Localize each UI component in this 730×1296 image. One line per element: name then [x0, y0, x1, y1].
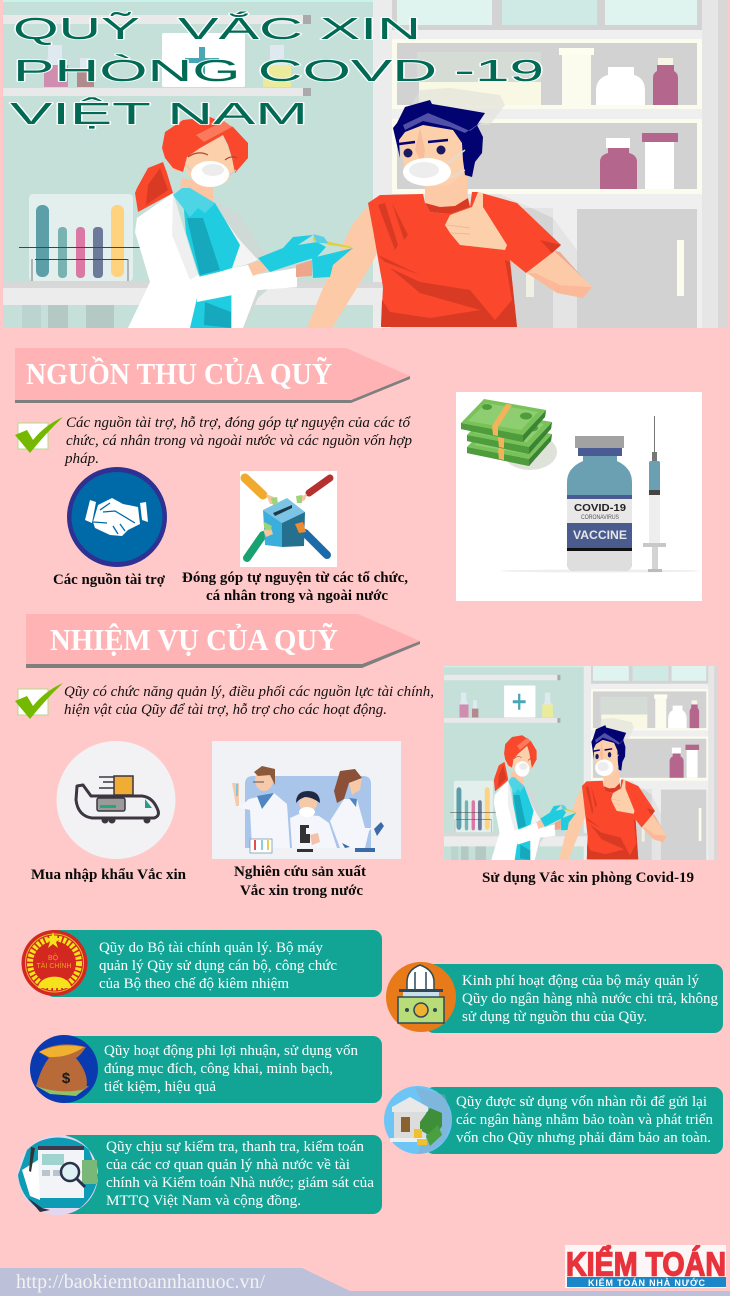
label: vaccine import: Mua nhập khẩu Vắc xin: [31, 867, 186, 883]
hero illustration: nurse vaccinating a man in a clinic: [3, 0, 728, 328]
footer band with website url: http://baokiemtoannhanuoc.vn/: [16, 1271, 265, 1293]
icon: ministry of finance emblem: TÀI CHÍNH: [36, 961, 72, 970]
text block: Kinh phí hoạt động của bộ máy quản lý: [462, 973, 700, 989]
text block: tiết kiệm, hiệu quả: [104, 1079, 217, 1095]
icon: cargo plane: [56, 741, 176, 859]
text block: duties description: [64, 684, 434, 718]
icon: ministry of finance emblem: BỘ: [48, 953, 59, 962]
panel: inspection and audit: [18, 1135, 382, 1215]
title: VIỆT NAM: [10, 96, 308, 131]
text block: duties description: hiện vật của Qũy để tài trợ, hỗ trợ cho các hoạt động.: [64, 702, 387, 718]
text block: đúng mục đích, công khai, minh bạch,: [104, 1061, 333, 1077]
icon: money bag: [30, 1035, 98, 1103]
image: money and covid-19 vaccine: VACCINE: [573, 528, 627, 542]
title: PHÒNG COVD -19: [13, 53, 544, 88]
text block: Qũy do ngân hàng nhà nước chi trả, không: [462, 991, 718, 1007]
text block: Qũy hoạt động phi lợi nhuận, sử dụng vốn: [104, 1043, 359, 1059]
title: [10, 10, 544, 131]
heading: fund duties: NHIỆM VỤ CỦA QUỸ: [50, 622, 338, 657]
panel: managed by ministry of finance: [22, 930, 382, 997]
label: domestic research: Nghiên cứu sản xuất: [234, 864, 366, 880]
text block: chính và Kiểm toán Nhà nước; giám sát của: [106, 1175, 375, 1191]
image: money and covid-19 vaccine: [456, 392, 702, 601]
image: money and covid-19 vaccine: COVID-19: [574, 502, 626, 514]
heading: revenue sources: NGUỒN THU CỦA QUỸ: [26, 355, 332, 391]
label: voluntary contributions: [182, 570, 408, 604]
image: vaccination scene: [444, 666, 718, 860]
icon: money bag: $: [62, 1070, 71, 1087]
text block: [99, 940, 337, 992]
label: domestic research: Vắc xin trong nước: [240, 883, 364, 899]
icon: bank with money: [384, 1086, 452, 1154]
text block: duties description: Qũy có chức năng quản lý, điều phối các nguồn lực tài chính,: [64, 684, 434, 700]
text block: [462, 973, 718, 1025]
panel: operating costs: [386, 962, 723, 1033]
icon: state bank and banknote: [386, 962, 456, 1032]
image: scientists researching: [212, 741, 401, 859]
text block: revenue description: Các nguồn tài trợ, hỗ trợ, đóng góp tự nguyện của các tổ: [66, 415, 411, 431]
logo: Kiểm Toán: KIỂM TOÁN NHÀ NƯỚC: [588, 1277, 706, 1288]
label: voluntary contributions: Đóng góp tự nguyện từ các tổ chức,: [182, 570, 408, 586]
label: sponsorship: Các nguồn tài trợ: [53, 572, 165, 588]
image: ballot box with donating hands: [240, 471, 337, 567]
text block: của Bộ theo chế độ kiêm nhiệm: [99, 976, 290, 992]
icon: check mark: [15, 417, 63, 453]
text block: [104, 1043, 359, 1095]
heading: fund duties: [26, 614, 420, 668]
image: money and covid-19 vaccine: CORONAVIRUS: [581, 515, 619, 521]
text block: Qũy được sử dụng vốn nhàn rỗi để gửi lại: [456, 1094, 707, 1110]
text block: [456, 1094, 714, 1146]
text block: quản lý Qũy sử dụng cán bộ, công chức: [99, 958, 337, 974]
panel: non-profit operation: [30, 1035, 382, 1103]
label: domestic research: [234, 864, 366, 899]
panel: idle capital deposits: [384, 1086, 723, 1154]
text block: Qũy do Bộ tài chính quản lý. Bộ máy: [99, 940, 324, 956]
text block: revenue description: [64, 415, 412, 467]
text block: của các cơ quan quản lý nhà nước về tài: [106, 1157, 350, 1173]
text block: revenue description: chức, cá nhân trong và ngoài nước và các nguồn vốn hợp: [66, 433, 412, 449]
icon: ministry of finance emblem: [22, 930, 88, 996]
icon: handshake: [67, 467, 167, 567]
footer band with website url: [0, 1268, 730, 1296]
text block: các ngân hàng nhằm bảo toàn và phát triển: [456, 1112, 714, 1128]
text block: [106, 1139, 375, 1209]
text block: revenue description: pháp.: [64, 451, 99, 467]
text block: sử dụng từ nguồn thu của Qũy.: [462, 1009, 647, 1025]
text block: Qũy chịu sự kiểm tra, thanh tra, kiểm toán: [106, 1139, 365, 1155]
icon: check mark: [15, 683, 63, 719]
heading: revenue sources: [15, 348, 410, 403]
title: QUỸ: [13, 11, 140, 46]
label: vaccine use: Sử dụng Vắc xin phòng Covid-19: [482, 870, 694, 886]
label: voluntary contributions: cá nhân trong và ngoài nước: [206, 588, 389, 604]
text block: vốn cho Qũy nhưng phải đảm bảo an toàn.: [456, 1130, 711, 1146]
title: VẮC XIN: [178, 10, 421, 46]
text block: MTTQ Việt Nam và cộng đồng.: [106, 1193, 301, 1209]
icon: audit documents and magnifier: [18, 1135, 98, 1215]
